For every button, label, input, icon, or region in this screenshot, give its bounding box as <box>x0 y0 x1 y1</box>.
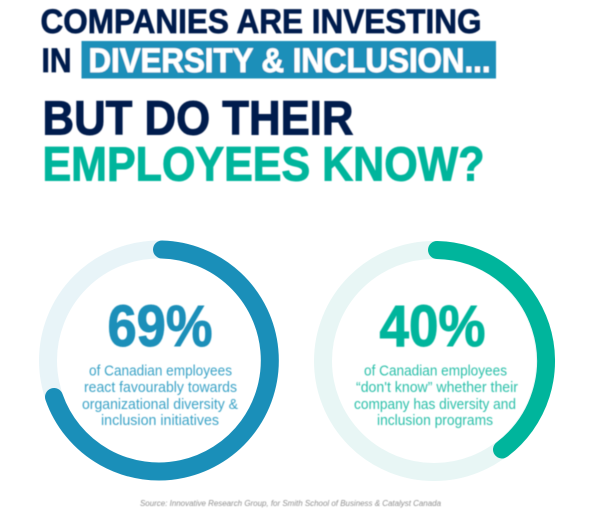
ring track <box>48 250 270 472</box>
heading line 4: EMPLOYEES KNOW? <box>42 138 484 192</box>
panel: 40% stat <box>323 250 546 472</box>
description: company has diversity and <box>354 396 516 413</box>
heading line 1: COMPANIES ARE INVESTING <box>40 3 482 41</box>
highlighted phrase: DIVERSITY & INCLUSION... <box>88 42 490 80</box>
stat text <box>354 294 518 429</box>
description: organizational diversity & <box>82 396 238 413</box>
heading line 3: BUT DO THEIR <box>42 92 354 146</box>
description: “don't know” whether their <box>356 379 518 396</box>
ring progress 69% <box>54 250 270 471</box>
stat text <box>82 294 238 429</box>
heading line 2 prefix: IN <box>42 42 72 80</box>
ring track <box>323 250 545 472</box>
description: inclusion programs <box>377 412 493 429</box>
source note: Source: Innovative Research Group, for Smith School of Business & Catalyst Canada <box>140 498 441 508</box>
panel: 69% stat <box>48 250 270 472</box>
description <box>82 362 238 429</box>
ring progress 40% <box>437 250 546 450</box>
highlight band <box>82 41 496 80</box>
description <box>354 362 518 429</box>
title block <box>40 3 496 192</box>
number: 40% <box>380 294 486 359</box>
description: of Canadian employees <box>364 362 507 380</box>
description: inclusion initiatives <box>101 412 219 429</box>
description: of Canadian employees <box>89 362 232 380</box>
description: react favourably towards <box>84 379 237 396</box>
number: 69% <box>108 294 212 359</box>
